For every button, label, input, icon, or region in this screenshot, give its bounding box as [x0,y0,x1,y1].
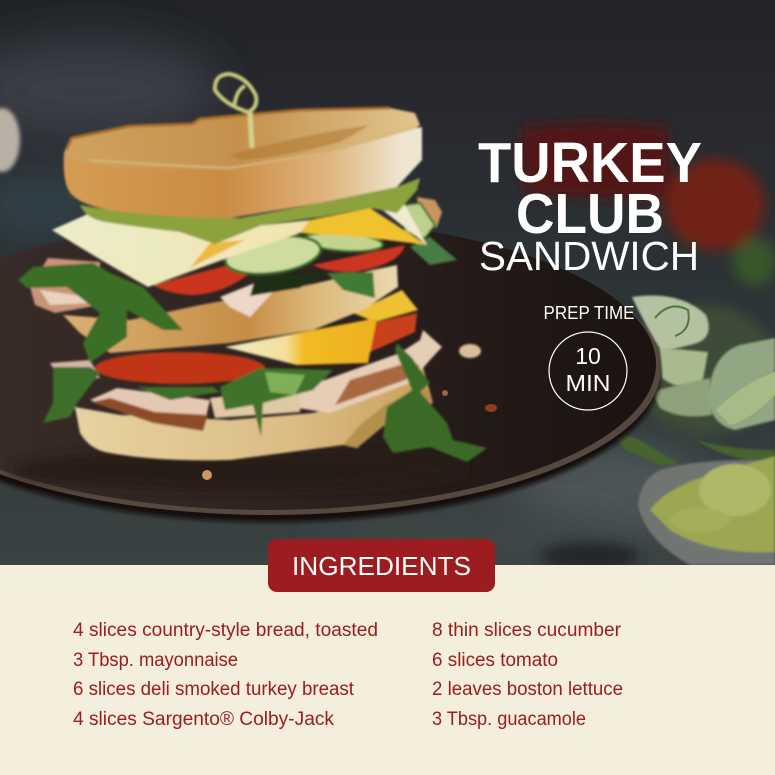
top bread toast [64,108,420,170]
right-hand details [417,197,442,230]
upper cheese [52,213,310,287]
prep time badge [544,303,634,410]
bottom bread [75,367,433,460]
ingredients left column [73,620,378,730]
sandwich [18,74,487,462]
toast top rim [66,108,390,150]
ingredients right column: 3 Tbsp. guacamole [432,709,586,730]
tomatoes [153,262,250,295]
title: SANDWICH [479,233,699,279]
right tomato and cheese [353,290,418,322]
cucumber slices [302,230,384,254]
ingredients left column: 4 slices country-style bread, toasted [73,620,378,641]
ingredients panel [0,565,775,775]
upper lettuce [18,263,183,363]
ingredients right column: 8 thin slices cucumber [432,620,622,641]
prep time badge: PREP TIME [544,303,634,323]
guacamole bowl [638,456,775,565]
prep time badge: MIN [566,370,610,396]
blurred tomato background [520,123,775,286]
ingredients left column: 4 slices Sargento® Colby-Jack [73,709,334,730]
title: TURKEY [478,131,702,195]
ingredients heading: INGREDIENTS [292,551,471,581]
middle bread [63,265,398,353]
title: CLUB [516,182,664,246]
cucumber ribbons and greens [610,295,775,465]
ingredients left column: 3 Tbsp. mayonnaise [73,650,238,671]
guacamole spread [80,178,420,244]
lower lettuce [43,367,100,423]
title [478,131,702,279]
ingredients left column: 6 slices deli smoked turkey breast [73,679,355,700]
bottom tomato [95,352,265,384]
prep time badge: 10 [575,343,601,369]
ingredients heading [268,539,495,592]
top bread crust [64,127,422,218]
middle cheese [225,318,377,365]
ingredients right column [432,620,623,730]
lower turkey [297,330,442,413]
upper turkey [30,258,100,313]
plate [0,218,661,522]
photo background [0,0,775,570]
ingredients right column: 2 leaves boston lettuce [432,679,623,700]
toothpick [215,74,256,148]
ingredients right column: 6 slices tomato [432,650,558,671]
